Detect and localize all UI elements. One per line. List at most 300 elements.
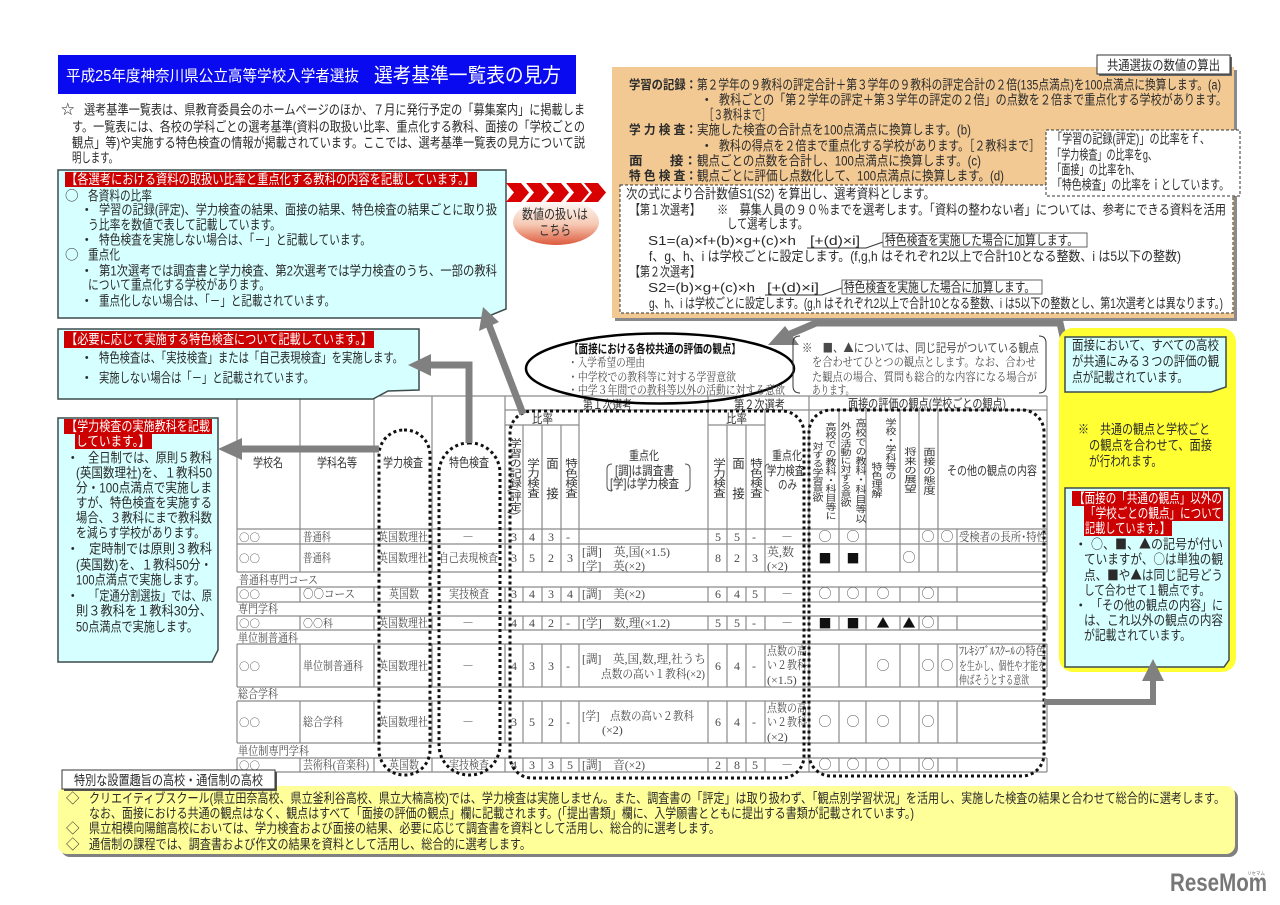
callout: ratio variables: 「学力検査」の比率をg、 <box>1052 148 1157 162</box>
table row: 芸術科: 4 <box>511 758 517 772</box>
ellipse: common interview viewpoints: ・入学希望の理由 <box>568 354 645 370</box>
icon: red chevrons and button: こちら <box>539 223 571 238</box>
table row: 芸術科: 5 <box>752 758 758 772</box>
note: symbols <box>793 336 1046 397</box>
table row: ○○コース: 英国数 <box>389 586 419 601</box>
formula box: 特色検査を実施した場合に加算します。 <box>885 233 1078 248</box>
panel: academic test subjects: ・ <box>66 588 80 604</box>
title banner <box>58 55 576 94</box>
table row: 普通科 1: ○ <box>921 526 935 545</box>
table row: ○○科: 4 <box>529 616 535 630</box>
table row: 普通科 1: 受検者の長所･特性 <box>959 529 1047 544</box>
table row: 普通科 2: 英,数 <box>767 544 794 559</box>
table row: ○○科: 4 <box>511 616 517 630</box>
table row: 芸術科: [調] 音(×2) <box>582 758 645 772</box>
table row: 総合学科: ○ <box>818 711 832 730</box>
title banner: 選考基準一覧表の見方 <box>374 64 561 87</box>
table row: 単位制普通科: ○○ <box>239 659 260 674</box>
intro text block: 選考基準一覧表は、県教育委員会のホームページのほか、７月に発行予定の「募集案内」に掲載しま <box>84 102 585 118</box>
heading: special exam panel: 【必要に応じて実施する特色検査について記載しています。】 <box>66 332 372 347</box>
callout: common viewpoints <box>1065 337 1226 392</box>
table row: ○○コース: ○ <box>921 583 935 602</box>
table row: 普通科 2: 8 <box>715 551 721 565</box>
panel: calculation of scores: 観点ごとの点数を合計し、100点満点に換算します。(c) <box>697 154 981 168</box>
table row: 普通科 2: ■ <box>846 548 860 567</box>
intro text block: 明します。 <box>72 150 118 166</box>
table row: 普通科 1: ○ <box>818 526 832 545</box>
table row: 総合学科: 英国数理社 <box>378 714 428 729</box>
callout: school viewpoints: ていますが、○は単独の観 <box>1084 548 1223 568</box>
table row: 単位制普通科: 点数の高い１教科(×2) <box>601 666 705 681</box>
table row: 総合学科: - <box>752 715 756 729</box>
table row: 総合学科: 4 <box>734 715 740 729</box>
table row: 総合学科: ○○ <box>239 715 260 730</box>
table row: 普通科 1: ○ <box>846 526 860 545</box>
heading: ratio panel: 【各選考における資料の取扱い比率と重点化する教科の内容を記載しています。】 <box>66 171 475 187</box>
table group labels: 単位制専門学科 <box>238 743 309 758</box>
table header: 接 <box>730 486 744 500</box>
table row: 単位制普通科: 3 <box>529 659 535 673</box>
panel: special exam: ・ <box>80 370 94 386</box>
table row: 総合学科: 3 <box>511 715 517 729</box>
table row: 総合学科 <box>239 700 935 744</box>
tag: calculation heading <box>1097 55 1232 76</box>
dotted outline: 特色検査 column <box>439 443 500 775</box>
table group labels: 普通科専門コース <box>239 572 318 587</box>
table row: 総合学科: － <box>462 715 474 729</box>
note: symbols: た観点の場合、質問も総合的な内容になる場合が <box>812 369 1037 384</box>
formula box: 【第１次選考】 <box>630 202 700 218</box>
table row: 総合学科: [学] 点数の高い２教科 <box>582 708 694 723</box>
panel: calculation of scores: 教科の得点を２倍まで重点化する学校があります。［２教科まで］ <box>719 138 1040 154</box>
table header: 特色検査 <box>748 457 762 498</box>
intro text block: す。一覧表には、各校の学科ごとの選考基準(資料の取扱い比率、重点化する教科、面接の「学校ごとの <box>72 118 585 134</box>
arrow: to common viewpoint ellipse <box>768 323 1066 350</box>
table row: ○○科: ■ <box>846 613 860 632</box>
table row: 芸術科: 8 <box>734 758 740 772</box>
table header: 対する学習意欲 <box>811 442 824 502</box>
panel: ratio and priority: 重点化しない場合は、「－」と記載されています。 <box>99 294 335 308</box>
callout: school viewpoints: ・ <box>1074 598 1088 613</box>
table row: 普通科 1: 英国数理社 <box>378 529 428 544</box>
table row: 単位制普通科: 伸ばそうとする意欲 <box>959 672 1029 687</box>
table row: ○○コース: 4 <box>567 587 573 601</box>
table row: ○○科: - <box>752 616 756 630</box>
table row: 総合学科: ○ <box>876 711 890 730</box>
heading: academic test panel: しています。】 <box>76 434 150 449</box>
panel: special schools notes: ◇ <box>66 787 80 807</box>
table row: 普通科 1: ○○ <box>239 530 260 545</box>
table row: ○○科: ▲ <box>876 613 890 632</box>
table group labels <box>238 572 318 758</box>
table row: ○○コース: 3 <box>511 587 517 601</box>
panel: calculation of scores: 学 力 検 査： <box>629 122 697 137</box>
table row: 普通科 1: 普通科 <box>303 529 331 544</box>
arrow: to special exam panel <box>408 354 469 443</box>
dotted outline: 第1次・第2次選考 columns <box>510 411 804 778</box>
panel: special schools notes: なお、面接における共通の観点はなく、観点はすべて「面接の評価の観点」欄に記載されます。(「提出書類」欄に、入学願書とともに提出する書類が記載されています。) <box>89 806 914 821</box>
panel: ratio and priority: ○ <box>65 244 78 264</box>
table row: ○○コース: ○○コース <box>303 585 355 602</box>
table row: ○○コース: 4 <box>529 587 535 601</box>
table row: ○○コース: 5 <box>752 587 758 601</box>
table row: 普通科 2: 2 <box>548 551 554 565</box>
icon: red chevrons and button <box>506 183 606 245</box>
table header: 高校での教科・科目等に <box>824 421 836 520</box>
table header: 学習の記録(評定) <box>507 437 521 515</box>
table row: 普通科 2: [調] 英,国(×1.5) <box>582 545 670 559</box>
table row: ○○科: - <box>566 616 570 630</box>
table row: 単位制普通科: ○ <box>876 655 890 674</box>
table row: 芸術科: 芸術科(音楽科) <box>303 757 369 772</box>
panel: academic test subjects: 全日制では、原則５教科 <box>88 450 212 466</box>
table row: 芸術科 <box>239 754 935 773</box>
table row: 単位制普通科: ○ <box>921 655 935 674</box>
table row: ○○コース: ○ <box>876 583 890 602</box>
ellipse: common interview viewpoints: ・中学校での教科等に対する学習意欲 <box>568 369 736 384</box>
table grid <box>237 396 1047 772</box>
table row: 普通科 1: - <box>752 530 756 544</box>
table row: 普通科 2: 3 <box>752 551 758 565</box>
callout: common viewpoints: 点が記載されています。 <box>1072 370 1188 385</box>
table row: ○○コース <box>239 583 935 602</box>
table row: 総合学科: 点数の高 <box>767 700 807 715</box>
table row: 総合学科: (×2) <box>767 730 788 744</box>
table row: 普通科 1: － <box>462 530 474 544</box>
table row: 単位制普通科: 4 <box>734 659 740 673</box>
ellipse: common interview viewpoints: 【面接における各校共通の評価の観点】 <box>569 341 741 356</box>
panel: academic test subjects: 分・100点満点で実施しま <box>76 480 212 496</box>
table header: 学校名 <box>253 455 283 470</box>
table row: 普通科 1: - <box>566 530 570 544</box>
table row: 総合学科: 総合学科 <box>303 714 343 729</box>
note: combined viewpoints <box>1078 422 1212 469</box>
table row: 単位制普通科: 点数の高 <box>767 643 807 658</box>
table header: 学力検査 <box>767 463 804 478</box>
table row: 芸術科: 5 <box>567 758 573 772</box>
panel: ratio and priority: 各資料の比率 <box>88 188 152 204</box>
panel: special schools notes: ◇ <box>66 833 80 853</box>
data table <box>237 396 1047 773</box>
table row: ○○コース: ○ <box>846 583 860 602</box>
callout: common viewpoints: 面接において、すべての高校 <box>1072 337 1219 353</box>
tag: special schools heading <box>62 770 277 791</box>
dotted outline: 面接の評価の観点 columns <box>809 410 1044 776</box>
callout: school viewpoints: ○、■、▲の記号が付い <box>1091 533 1223 553</box>
table row: 普通科 2: 3 <box>567 551 573 565</box>
panel: ratio and priority: 第1次選考では調査書と学力検査、第2次選考では学力検査のうち、一部の教科 <box>99 262 497 278</box>
table row: ○○科 <box>239 612 935 632</box>
table header: 特色理解 <box>870 461 882 499</box>
table row: ○○科: ○ <box>921 612 935 631</box>
panel: special exam: ・ <box>80 350 94 366</box>
table row: 普通科 2 <box>239 544 916 573</box>
formula box: して選考します。 <box>727 216 808 232</box>
arrow: to academic test panel <box>218 438 379 460</box>
callout: school viewpoints: 記載しています。】 <box>1085 521 1170 536</box>
formula box: [+(d)×i] <box>810 233 860 248</box>
table row: 芸術科: 実技検査 <box>449 757 489 772</box>
panel: academic test subjects: 定時制では原則３教科 <box>89 542 212 556</box>
table header: 特色検査 <box>563 457 577 498</box>
tag: calculation heading: 共通選抜の数値の算出 <box>1107 58 1220 73</box>
table header <box>253 396 1037 523</box>
panel: special exam <box>58 329 419 399</box>
table row: 普通科 1: － <box>781 530 793 544</box>
panel: ratio and priority: 重点化 <box>88 248 120 262</box>
table header: その他の観点の内容 <box>947 464 1037 478</box>
table header: 外の活動に対する意欲 <box>839 422 852 507</box>
table header: のみ <box>778 478 797 492</box>
table row: 芸術科: 2 <box>715 758 721 772</box>
panel: special schools notes: 県立相模向陽館高校においては、学力検査および面接の結果、必要に応じて調査書を資料として活用し、総合的に選考します。 <box>89 820 720 836</box>
table row: 芸術科: ○○ <box>239 758 260 773</box>
table row: 単位制普通科: － <box>462 659 474 673</box>
panel: ratio and priority: ・ <box>80 294 94 308</box>
intro text block: 観点」等)や実施する特色検査の情報が掲載されています。ここでは、選考基準一覧表の見方について説 <box>72 134 585 150</box>
table header: 面接の態度 <box>921 447 935 495</box>
table row: 普通科 2: 自己表現検査 <box>439 550 498 565</box>
title banner: 平成25年度神奈川県公立高等学校入学者選抜 <box>66 67 359 85</box>
panel: academic test subjects: 場合、３教科にまで教科数 <box>76 510 212 526</box>
table row: 普通科 2: 5 <box>529 551 535 565</box>
table row: 普通科 2: ■ <box>818 548 832 567</box>
panel: ratio and priority: ○ <box>65 184 78 204</box>
table row: 単位制普通科: い２教科 <box>767 657 807 672</box>
table row: 単位制普通科: 単位制普通科 <box>303 658 363 673</box>
logo: ReseMom: リセマム <box>1247 871 1265 877</box>
panel: academic test subjects: 則３教科を１教科30分、 <box>76 604 212 618</box>
table header: 学力検査 <box>525 457 539 498</box>
heading: academic test panel <box>64 419 212 449</box>
table row: 芸術科: 英国数 <box>389 757 419 772</box>
table header: 重点化 <box>629 448 659 463</box>
table row: 普通科 1: 4 <box>529 530 535 544</box>
callout: common viewpoints: が共通にみる３つの評価の観 <box>1072 354 1219 369</box>
table header: 高校での教科・科目等以 <box>854 417 866 523</box>
table row: 芸術科: 3 <box>548 758 554 772</box>
panel: special schools notes: 通信制の課程では、調査書および作文の結果を資料として活用し、総合的に選考します。 <box>89 837 531 852</box>
panel: special schools notes: ◇ <box>66 817 80 837</box>
table row: 単位制普通科: ○ <box>940 655 954 674</box>
table row: ○○コース: 4 <box>734 587 740 601</box>
panel: calculation of scores: ［３教科まで］ <box>704 108 771 122</box>
panel: calculation of scores: 面 接： <box>629 153 697 168</box>
panel: calculation of scores <box>612 67 1237 321</box>
panel: special exam: 特色検査は、「実技検査」または「自己表現検査」を実施します。 <box>99 350 403 366</box>
panel: ratio and priority: 学習の記録(評定)、学力検査の結果、面接の結果、特色検査の結果ごとに取り扱 <box>99 202 497 218</box>
heading: academic test panel: 【学力検査の実施教科を記載 <box>66 419 210 434</box>
table row: 普通科 2: 3 <box>511 551 517 565</box>
table row: ○○科: 5 <box>734 616 740 630</box>
table header: 面 <box>544 457 558 470</box>
formula box: 【第２次選考】 <box>630 264 700 280</box>
table row: ○○科: ○○科 <box>303 615 333 631</box>
panel: academic test subjects <box>58 418 218 662</box>
table row: 普通科 2: 普通科 <box>303 550 331 565</box>
ellipse: common interview viewpoints: ・中学３年間での教科等以外の活動に対する意欲 <box>568 382 785 397</box>
table row: 単位制普通科: ﾌﾚｷｼﾌﾞﾙｽｸｰﾙの特色 <box>959 643 1046 658</box>
table row: 普通科 1: 5 <box>734 530 740 544</box>
table row: ○○コース: 6 <box>715 587 721 601</box>
table header: 接 <box>544 486 558 500</box>
panel: academic test subjects: 50点満点で実施します。 <box>76 620 198 634</box>
panel: academic test subjects: を減らす学校があります。 <box>76 524 205 540</box>
table row: 普通科 2: (×2) <box>767 559 788 573</box>
table row: 普通科 2: ○○ <box>239 551 260 566</box>
note: symbols: ※ ■、▲については、同じ記号がついている観点 <box>802 339 1039 356</box>
table row: 単位制普通科: 3 <box>548 659 554 673</box>
table row: 単位制普通科 <box>239 643 1046 687</box>
arrow: to school viewpoints <box>1044 659 1164 702</box>
panel: academic test subjects: (英国数)を、１教科50分・ <box>76 556 212 572</box>
panel: ratio and priority: について重点化する学校があります。 <box>88 278 270 292</box>
dotted outline: 学力検査 column <box>379 430 430 775</box>
panel: calculation of scores: 観点ごとに評価し点数化して、100点満点に換算します。(d) <box>697 168 1004 184</box>
table row: 単位制普通科: 6 <box>715 659 721 673</box>
callout: school viewpoints: 【面接の「共通の観点」以外の <box>1074 491 1222 506</box>
table row: 総合学科: ○ <box>921 711 935 730</box>
panel: academic test subjects: 100点満点で実施します。 <box>76 572 205 588</box>
panel: special exam: 実施しない場合は「－」と記載されています。 <box>99 370 314 386</box>
table header: 学科名等 <box>317 455 357 470</box>
table row: ○○科: ▲ <box>902 613 916 632</box>
table row: 普通科 1: 3 <box>511 530 517 544</box>
formula box: f、g、h、i は学校ごとに設定します。(f,g,h はそれぞれ2以上で合計10となる整数、i は5以下の整数) <box>649 249 1181 264</box>
table row: 芸術科: － <box>781 758 793 772</box>
table row: ○○コース: ○○ <box>239 587 260 602</box>
table row: 普通科 2: [学] 英(×2) <box>582 559 645 573</box>
table row: 普通科 1: ○ <box>940 526 954 545</box>
table row: ○○科: ■ <box>818 613 832 632</box>
table group labels: 総合学科 <box>238 686 278 701</box>
table row: 普通科 2: ○ <box>902 547 916 566</box>
table row: 普通科 2: 英国数理社 <box>378 550 428 565</box>
table row: ○○コース: 3 <box>548 587 554 601</box>
panel: academic test subjects: 「定通分割選抜」では、原 <box>89 588 212 604</box>
formula box: 特色検査を実施した場合に加算します。 <box>844 280 1035 295</box>
table row: 単位制普通科: を生かし、個性や才能を <box>959 658 1046 673</box>
table header: 学校・学科等の <box>884 417 896 480</box>
ellipse: common interview viewpoints <box>526 334 794 404</box>
callout: school viewpoints: 「その他の観点の内容」に <box>1091 597 1223 613</box>
table header: 面 <box>730 457 744 470</box>
panel: calculation of scores: ・ <box>700 92 714 108</box>
table row: ○○科: 2 <box>548 616 554 630</box>
formula box <box>620 185 1233 313</box>
table row: 芸術科: 3 <box>529 758 535 772</box>
table row: ○○科: ○○ <box>239 616 260 631</box>
callout: school viewpoints: は、これ以外の観点の内容 <box>1084 612 1223 628</box>
callout: school viewpoints: ・ <box>1074 537 1088 552</box>
table row: 芸術科: ○ <box>846 754 860 773</box>
tag: special schools heading: 特別な設置趣旨の高校・通信制の高校 <box>74 772 263 788</box>
panel: ratio and priority: 特色検査を実施しない場合は、「－」と記載しています。 <box>99 232 371 248</box>
table row: 単位制普通科: - <box>752 659 756 673</box>
panel: ratio and priority: ・ <box>80 202 94 218</box>
panel: calculation of scores: 学習の記録： <box>629 77 697 92</box>
panel: calculation of scores: ・ <box>700 138 714 154</box>
table row: 総合学科: 5 <box>529 715 535 729</box>
table row: 普通科 2: 2 <box>734 551 740 565</box>
formula box: [+(d)×i] <box>767 280 819 295</box>
table header: 第１次選考 <box>583 397 632 412</box>
panel: ratio and priority: ・ <box>80 264 94 278</box>
intro text block <box>61 98 585 166</box>
arrow: to ratio panel <box>479 307 523 414</box>
table row: ○○科: － <box>462 616 474 630</box>
formula box: S1=(a)×f+(b)×g+(c)×h <box>648 233 796 248</box>
table header: 学力検査 <box>711 457 725 498</box>
intro text block: ☆ <box>61 98 74 118</box>
table row: 普通科 1: 3 <box>548 530 554 544</box>
table group labels: 専門学科 <box>238 601 278 616</box>
note: combined viewpoints: が行われます。 <box>1089 454 1162 469</box>
panel: academic test subjects: (英国数理社)を、１教科50 <box>76 464 212 480</box>
table row: ○○コース: ○ <box>818 583 832 602</box>
table row: 普通科 1: 5 <box>715 530 721 544</box>
panel: academic test subjects: ・ <box>66 542 80 556</box>
table row: 総合学科: - <box>566 715 570 729</box>
note: symbols: あります。 <box>812 383 854 397</box>
icon: red chevrons and button: 数値の扱いは <box>522 207 588 222</box>
table row: ○○科: － <box>781 616 793 630</box>
table header: 重点化 <box>772 448 802 463</box>
table header: 比率 <box>532 412 553 426</box>
callout: school viewpoints: 点、■や▲は同じ記号どう <box>1084 564 1223 584</box>
note: combined viewpoints: ※ 共通の観点と学校ごと <box>1078 422 1210 437</box>
callout: school viewpoints: が記載されています。 <box>1084 628 1191 643</box>
panel: ratio and priority: ・ <box>80 232 94 248</box>
table row: 単位制普通科: - <box>566 659 570 673</box>
table row: 芸術科: ○ <box>818 754 832 773</box>
table header: [学]は学力検査 <box>610 476 679 491</box>
table row: 総合学科: い２教科 <box>767 714 807 729</box>
panel: calculation of scores: 特 色 検 査： <box>629 168 697 183</box>
callout: school viewpoints <box>1065 488 1229 667</box>
table row: ○○科: [学] 数,理(×1.2) <box>582 615 670 630</box>
note: combined viewpoints: の観点を合わせて、面接 <box>1089 438 1212 453</box>
panel: academic test subjects: ・ <box>66 450 80 466</box>
table row: 総合学科: 6 <box>715 715 721 729</box>
table row: 総合学科: (×2) <box>602 723 623 737</box>
panel: interview viewpoints (yellow) <box>1059 328 1236 672</box>
note: symbols: を合わせてひとつの観点とします。なお、合わせ <box>812 354 1036 369</box>
table header: 特色検査 <box>449 455 489 470</box>
table row: ○○コース: [調] 美(×2) <box>582 587 645 601</box>
table header: 面接の評価の観点(学校ごとの観点) <box>848 396 1006 411</box>
table header: [調]は調査書 <box>615 464 674 478</box>
table row: ○○科: 英国数理社 <box>378 615 428 630</box>
table header: 第２次選考 <box>734 397 785 412</box>
table header: 将来の展望 <box>902 447 916 493</box>
table row: 単位制普通科: 英国数理社 <box>378 658 428 673</box>
callout: ratio variables <box>1046 130 1240 196</box>
table row: 芸術科: ○ <box>921 754 935 773</box>
table row: 単位制普通科: [調] 英,国,数,理,社うち <box>582 651 706 666</box>
table row: 総合学科: ○ <box>846 711 860 730</box>
formula box: S2=(b)×g+(c)×h <box>648 280 755 295</box>
table row: ○○コース: 実技検査 <box>449 586 489 601</box>
panel: special schools notes <box>58 786 1238 857</box>
table row: ○○科: 5 <box>715 616 721 630</box>
callout: ratio variables: 「学習の記録(評定)」の比率をｆ、 <box>1052 132 1210 146</box>
table group labels: 単位制普通科 <box>238 630 298 645</box>
callout: school viewpoints: 「学校ごとの観点」について <box>1085 506 1222 521</box>
panel: academic test subjects: すが、特色検査を実施する <box>76 496 212 510</box>
table header: 比率 <box>726 412 747 426</box>
panel: calculation of scores: 実施した検査の合計点を100点満点に換算します。(b) <box>697 122 971 138</box>
